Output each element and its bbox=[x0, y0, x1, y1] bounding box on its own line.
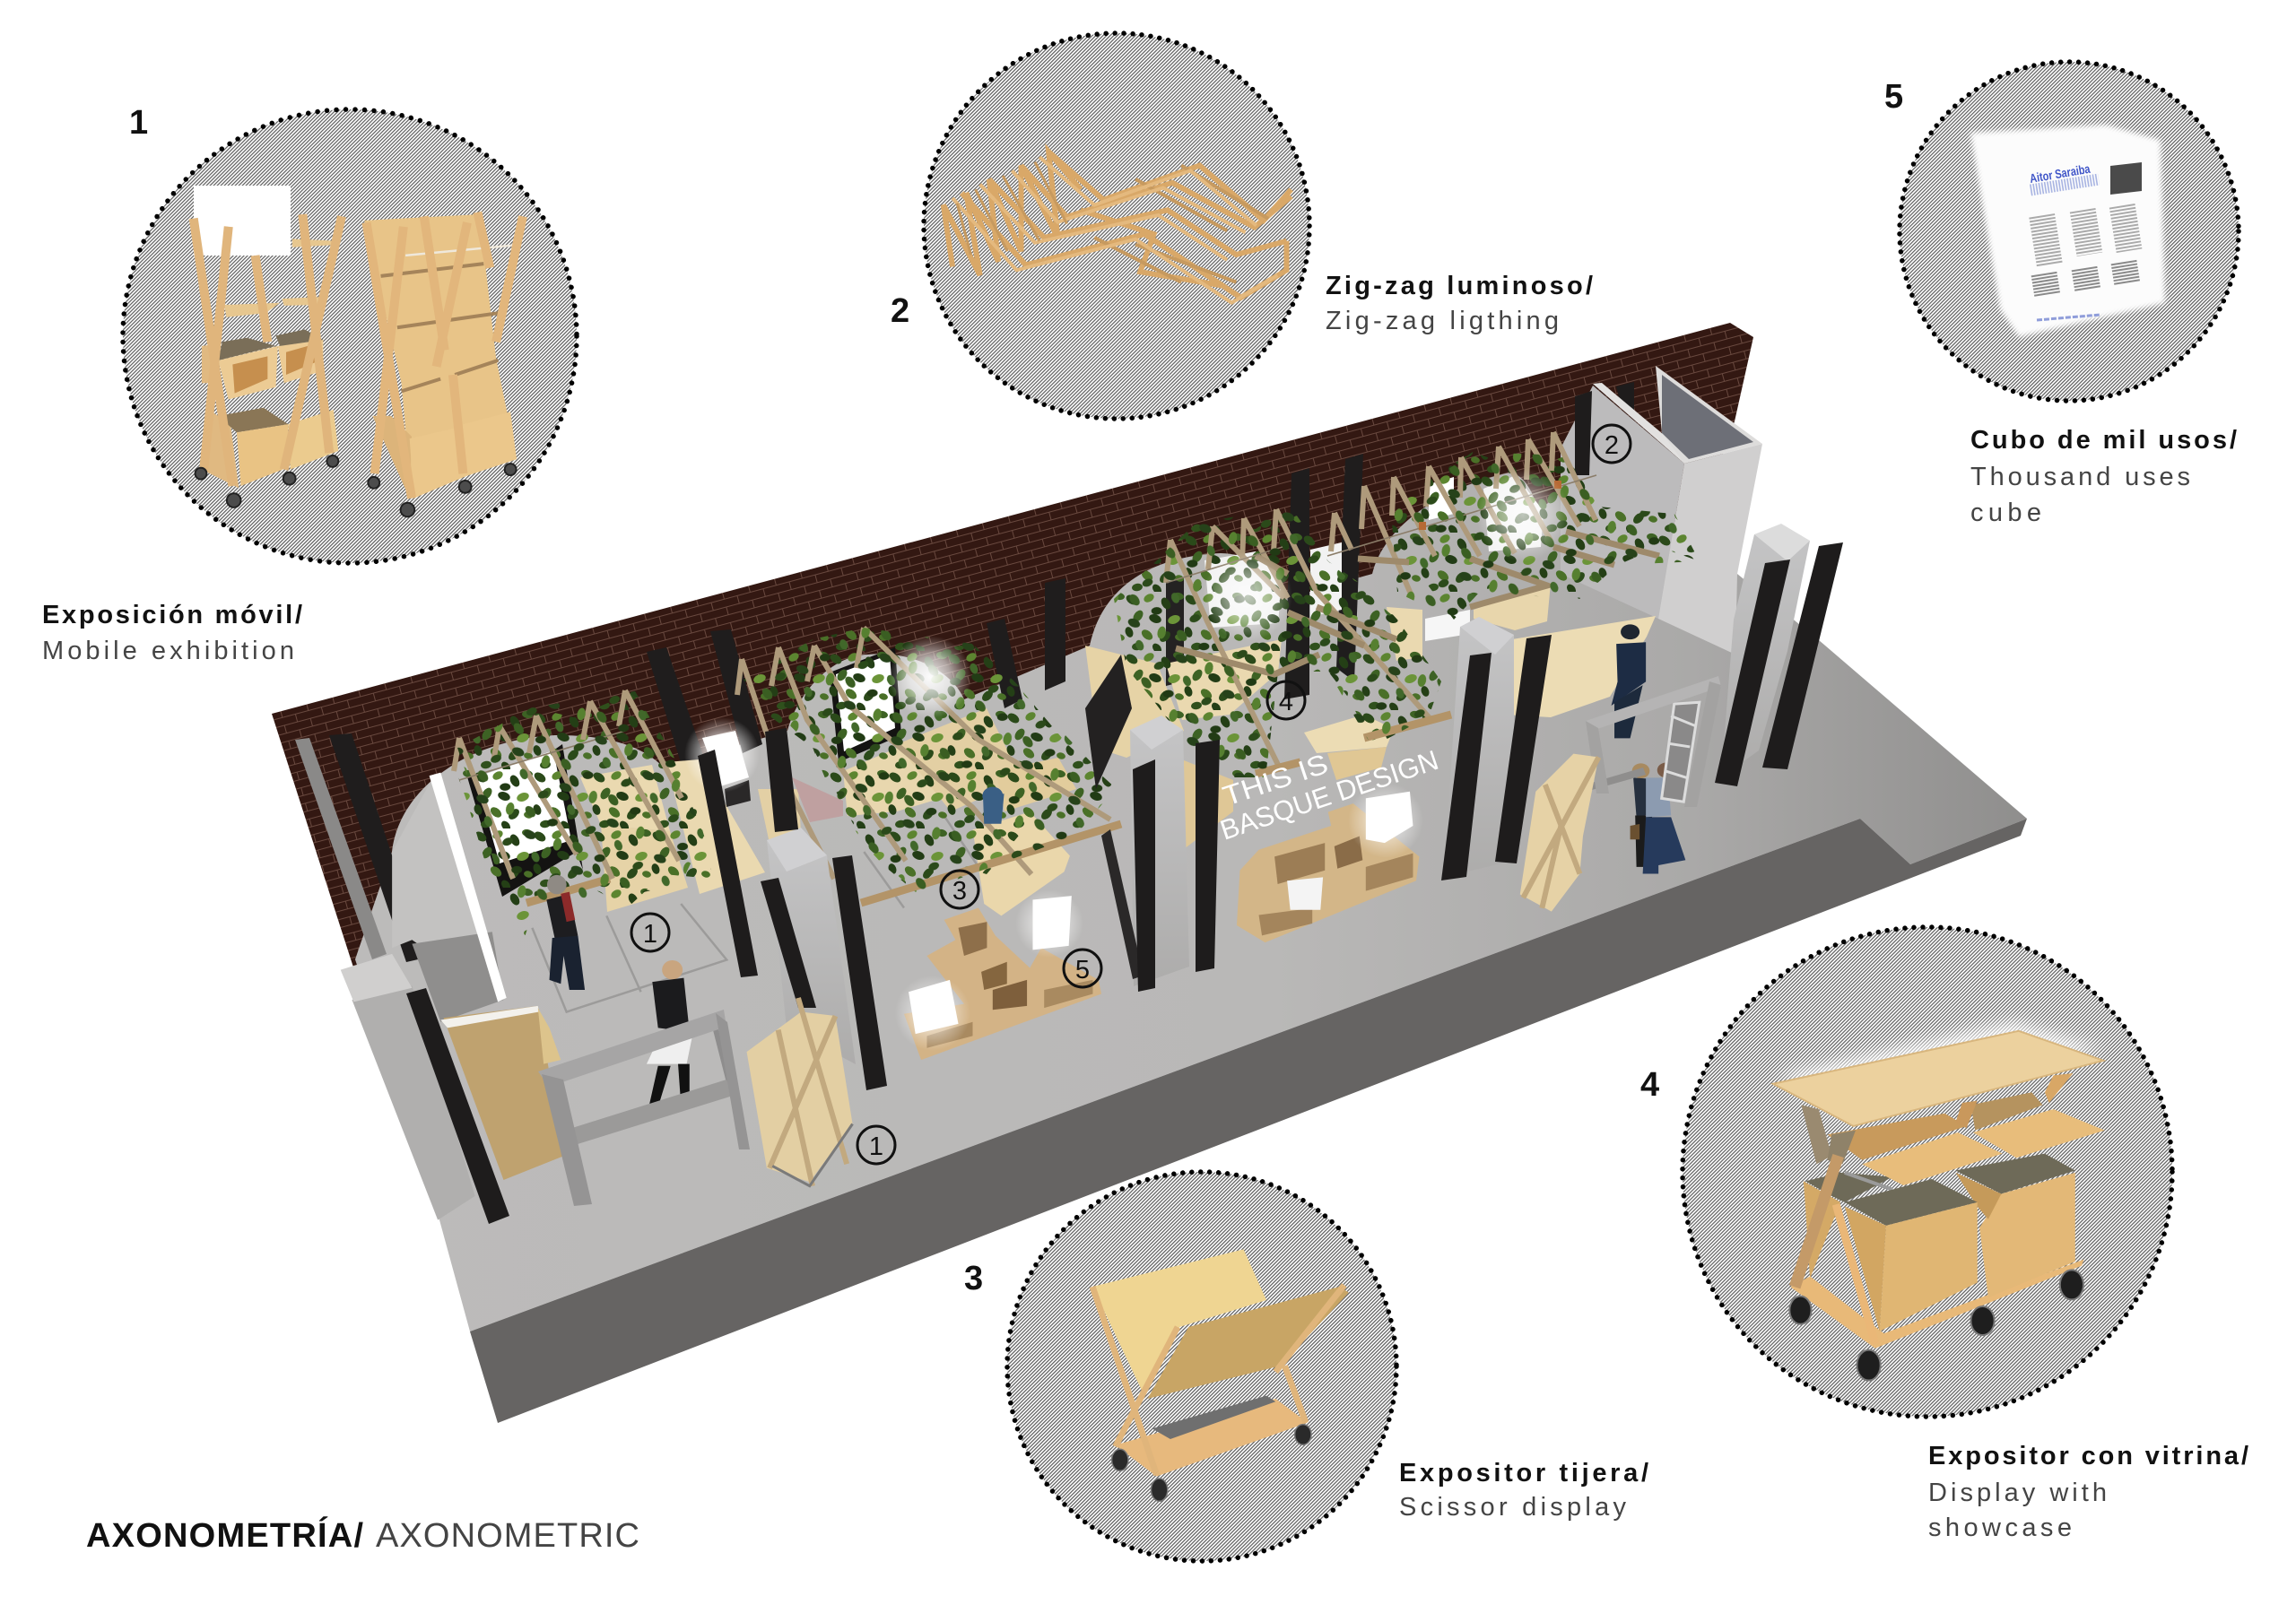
dotted ring 4 bbox=[1683, 927, 2172, 1417]
hatched disc 5 bbox=[1900, 62, 2239, 401]
stacked wood boxes with lamp cubes, right bbox=[1237, 792, 1419, 942]
panel 4: display with showcase detail bbox=[1683, 927, 2172, 1417]
hanging vines, back layer bbox=[453, 452, 1700, 937]
caption 3: Expositor tijera/ bbox=[1399, 1459, 1648, 1488]
caption 3 bbox=[1399, 1459, 1648, 1522]
numbered marker 2: 2 bbox=[1605, 431, 1619, 460]
caption 1: Mobile exhibition bbox=[42, 637, 294, 665]
caption 4: Display with bbox=[1928, 1479, 2107, 1507]
glowing ceiling lamps bbox=[684, 468, 1570, 1051]
rolling wood display on the walkway, left bbox=[747, 998, 853, 1186]
brick back wall bbox=[272, 323, 1753, 973]
soft glow behind table top bbox=[1780, 1022, 2103, 1116]
panel 5: thousand uses cube detail bbox=[1900, 62, 2239, 401]
numbered marker 2 bbox=[1593, 425, 1631, 463]
numbered marker 4 bbox=[1267, 681, 1305, 719]
caption 1: Exposición móvil/ bbox=[42, 601, 302, 629]
rear black columns and left wall strip bbox=[295, 454, 1363, 962]
caption 4: showcase bbox=[1928, 1514, 2072, 1542]
caption 5: cube bbox=[1970, 499, 2041, 527]
wooden zig-zag structure bbox=[944, 152, 1292, 303]
cube label portrait bbox=[2110, 162, 2142, 195]
caption 5: Thousand uses bbox=[1970, 463, 2190, 491]
dotted ring 1 bbox=[123, 109, 577, 563]
showcase cart on wheels bbox=[1773, 1031, 2105, 1381]
cube label name: Aitor Saraiba bbox=[2029, 161, 2092, 186]
numbered marker 4: 4 bbox=[1279, 688, 1293, 716]
numbered marker 1, walkway bbox=[857, 1126, 895, 1164]
dark slab edge around the floor bbox=[470, 819, 2027, 1423]
white sign panel bbox=[194, 186, 291, 256]
dotted ring 5 bbox=[1900, 62, 2239, 401]
numbered marker 5 bbox=[1064, 950, 1101, 987]
caption 2: Zig-zag luminoso/ bbox=[1326, 272, 1593, 300]
terracotta plant pots bbox=[1419, 481, 1561, 530]
numbered marker 3 bbox=[941, 871, 978, 908]
floor marking lines in the hall bbox=[532, 816, 990, 1012]
entrance portal frames with floor shadows bbox=[538, 676, 1721, 1206]
caption 1 bbox=[42, 601, 302, 665]
panel 3: scissor display detail bbox=[1007, 1172, 1396, 1561]
caption 4: Expositor con vitrina/ bbox=[1928, 1442, 2248, 1470]
white arch openings on the rear wall bbox=[466, 475, 1544, 897]
wooden zig-zag trellis frames bbox=[454, 432, 1659, 903]
hatched disc 1 bbox=[123, 109, 577, 563]
numbered marker 1, walkway: 1 bbox=[869, 1132, 883, 1161]
front black columns bbox=[406, 542, 1843, 1224]
numbered marker 1, hall: 1 bbox=[643, 920, 657, 949]
panel-back unit on wheels bbox=[364, 213, 523, 516]
scissor display in the hall bbox=[972, 811, 1070, 915]
open shelving unit on wheels bbox=[194, 214, 342, 507]
caption 5 bbox=[1970, 426, 2237, 527]
modular wood displays in the left half of the hall bbox=[580, 708, 1076, 912]
numbered marker 5: 5 bbox=[1075, 956, 1090, 984]
number 5: 5 bbox=[1884, 78, 1903, 116]
hatched disc 4 bbox=[1683, 927, 2172, 1417]
panel 1: mobile exhibition detail bbox=[123, 109, 577, 563]
dotted ring 3 bbox=[1007, 1172, 1396, 1561]
number 1: 1 bbox=[129, 104, 148, 142]
hatched disc 2 bbox=[924, 33, 1309, 419]
numbered marker 1, hall bbox=[631, 914, 669, 951]
caption 2: Zig-zag ligthing bbox=[1326, 307, 1559, 335]
scissor display on wheels bbox=[1092, 1249, 1349, 1501]
room floor and arched rear walls bbox=[355, 466, 2027, 1331]
number 4: 4 bbox=[1640, 1066, 1659, 1104]
panel 2: zig-zag lighting detail bbox=[924, 33, 1309, 419]
caption 3: Scissor display bbox=[1399, 1493, 1627, 1522]
axonometric view of the exhibition hall bbox=[272, 323, 2027, 1423]
modular wood displays in the right half of the hall bbox=[1085, 583, 1656, 849]
caption 4 bbox=[1928, 1442, 2248, 1542]
hanging vines, front layer bbox=[457, 452, 1700, 907]
stacked wood boxes with lamp cubes, left bbox=[904, 896, 1101, 1060]
wall lettering: this is basque design: BASQUE DESIGN bbox=[1216, 744, 1442, 846]
cube label text columns bbox=[2031, 179, 2129, 320]
dotted ring 2 bbox=[924, 33, 1309, 419]
front concrete pillars bbox=[767, 524, 1810, 1064]
number 3: 3 bbox=[964, 1260, 983, 1297]
title: axonometric: AXONOMETRIC bbox=[376, 1517, 639, 1555]
caption 2 bbox=[1326, 272, 1593, 335]
mesh ladder panels bbox=[715, 702, 1700, 1140]
numbered marker 3: 3 bbox=[952, 877, 967, 906]
concrete entry block, left bbox=[341, 954, 475, 1220]
number 2: 2 bbox=[891, 292, 909, 330]
people in the left half bbox=[546, 787, 1004, 1107]
title: axonometric: AXONOMETRÍA/ bbox=[86, 1515, 363, 1555]
wall lettering: this is basque design: THIS IS bbox=[1219, 748, 1332, 812]
title: axonometric bbox=[86, 1515, 639, 1555]
caption 5: Cubo de mil usos/ bbox=[1970, 426, 2237, 455]
translucent white cube bbox=[1970, 125, 2165, 337]
tall open concrete wall at the far end bbox=[1561, 366, 1762, 655]
people in the right half bbox=[1612, 624, 1685, 874]
hatched disc 3 bbox=[1007, 1172, 1396, 1561]
left arch and wood wall panel bbox=[392, 773, 563, 1180]
rolling wood display on the walkway, right bbox=[1520, 754, 1598, 912]
